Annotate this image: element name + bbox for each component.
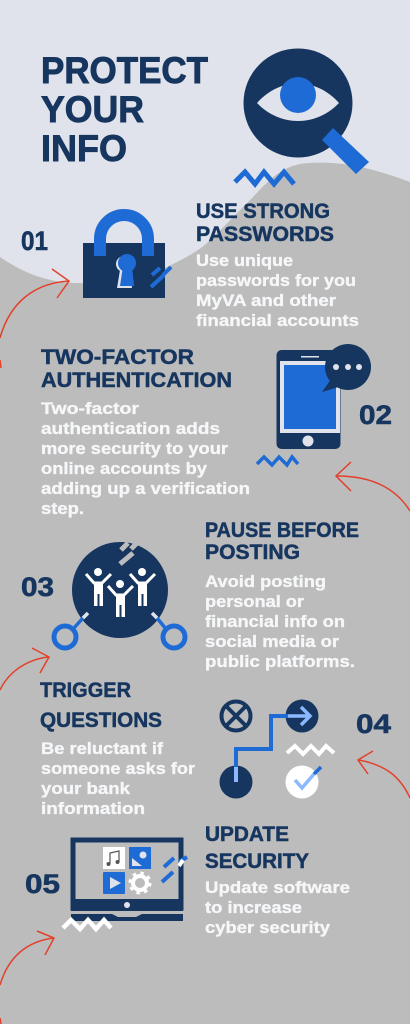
step 05 text: to increase [205, 898, 302, 917]
icon: magnifying glass with eye [244, 48, 369, 174]
step 03 text: Avoid posting [205, 572, 326, 591]
step 04 heading: QUESTIONS [40, 709, 162, 732]
decorative zigzag: step 02 [257, 457, 298, 465]
arrow: to step 02 [336, 462, 410, 511]
step 01 text: passwords for you [196, 271, 356, 290]
step 03 heading: POSTING [205, 541, 300, 564]
title [41, 50, 208, 169]
step 02 text: authentication adds [41, 419, 220, 438]
step 02 text [41, 399, 250, 518]
icon: laptop with apps [71, 840, 187, 921]
number 05: 05 [25, 869, 60, 899]
step 03 heading: PAUSE BEFORE [205, 519, 359, 542]
arrow: to step 03 [0, 648, 49, 690]
step 03 text: public platforms. [205, 652, 355, 671]
icon: smartphone with chat bubble [276, 344, 371, 449]
step 04 text: someone asks for [41, 759, 195, 778]
step 03 text: social media or [205, 632, 339, 651]
step 02 text: more security to your [41, 439, 228, 458]
number 03: 03 [21, 572, 54, 602]
step 04 text: Be reluctant if [41, 739, 163, 758]
decorative zigzag: step 05 [63, 920, 111, 929]
icon: decision path [220, 700, 321, 798]
number 02: 02 [359, 400, 392, 430]
step 02 text: Two-factor [41, 399, 139, 418]
step 03 text [205, 572, 355, 671]
step 05 text [205, 878, 350, 937]
step 02 heading [41, 346, 232, 392]
step 01 heading: USE STRONG [196, 200, 330, 223]
step 02 text: online accounts by [41, 459, 208, 478]
step 05 heading: UPDATE [205, 823, 289, 846]
arrow: to step 04 [358, 751, 410, 798]
title: YOUR [41, 89, 144, 130]
step 01 text: financial accounts [196, 311, 359, 330]
number 01: 01 [21, 226, 48, 256]
title: INFO [41, 128, 127, 169]
step 01 text [196, 251, 359, 330]
step 02 text: adding up a verification [41, 479, 250, 498]
step 04 heading [40, 679, 162, 732]
number 04: 04 [356, 709, 391, 739]
arrow: to step 01 [0, 269, 69, 368]
step 01 text: MyVA and other [196, 291, 336, 310]
step 04 text [41, 739, 195, 818]
title: PROTECT [41, 50, 208, 91]
step 04 text: your bank [41, 779, 131, 798]
step 02 heading: AUTHENTICATION [41, 369, 232, 392]
step 02 heading: TWO-FACTOR [41, 346, 194, 369]
arrow: to step 05 [0, 931, 54, 1024]
step 03 heading [205, 519, 359, 564]
step 05 heading: SECURITY [205, 850, 309, 873]
icon: padlock [83, 215, 171, 298]
step 03 text: financial info on [205, 612, 345, 631]
step 05 heading [205, 823, 309, 873]
step 05 text: cyber security [205, 918, 331, 937]
icon: people circle with rings [54, 541, 185, 648]
step 01 text: Use unique [196, 251, 293, 270]
step 01 heading: PASSWORDS [196, 223, 334, 246]
step 04 text: information [41, 799, 145, 818]
step 05 text: Update software [205, 878, 350, 897]
step 01 heading [196, 200, 334, 246]
decorative zigzag: header [235, 172, 294, 184]
step 02 text: step. [41, 499, 84, 518]
step 04 heading: TRIGGER [40, 679, 131, 702]
step 03 text: personal or [205, 592, 304, 611]
decorative zigzag: step 04 [287, 746, 334, 754]
